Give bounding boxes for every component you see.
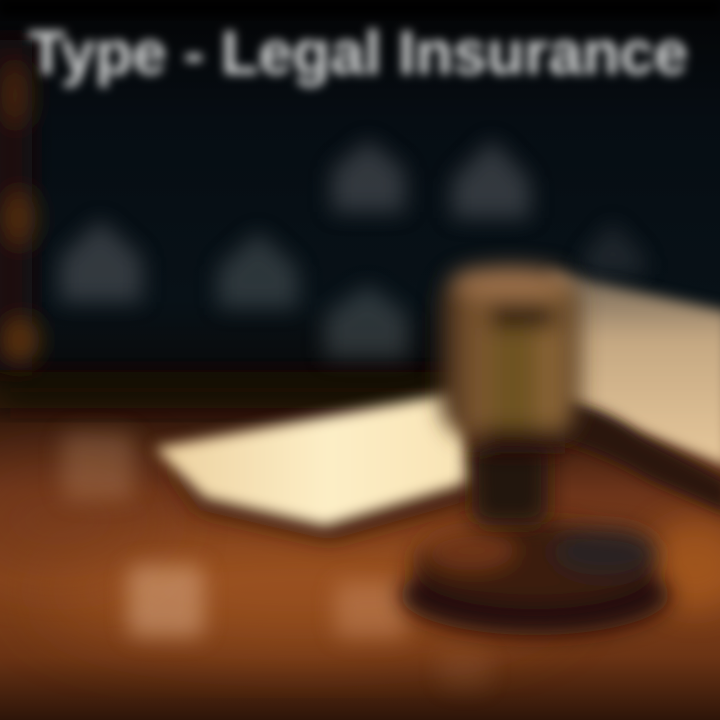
icon: type card 3 xyxy=(60,220,142,302)
document: left paper xyxy=(155,392,470,540)
insurance type icons xyxy=(60,140,645,690)
icon: type card 4 xyxy=(218,232,298,308)
icon: type card 2 xyxy=(452,140,530,218)
background wall xyxy=(0,0,720,400)
icon: table mark 1 xyxy=(62,432,134,500)
icon: type card 5 xyxy=(325,285,408,358)
document: right paper xyxy=(550,272,720,468)
gavel neck xyxy=(472,440,548,525)
top vignette xyxy=(0,0,720,16)
wooden table xyxy=(0,370,720,720)
icon: type card 1 xyxy=(332,140,405,212)
gavel xyxy=(400,266,720,635)
left wooden column xyxy=(0,40,40,370)
icon: table mark 4 xyxy=(440,650,490,690)
gavel handle xyxy=(555,402,720,515)
icon: type card 6 xyxy=(582,222,645,275)
title: Type - Legal Insurance xyxy=(28,19,688,88)
icon: table mark 3 xyxy=(335,582,407,638)
icon: table mark 2 xyxy=(128,565,204,637)
gavel base xyxy=(400,522,670,635)
gavel head xyxy=(440,266,580,452)
